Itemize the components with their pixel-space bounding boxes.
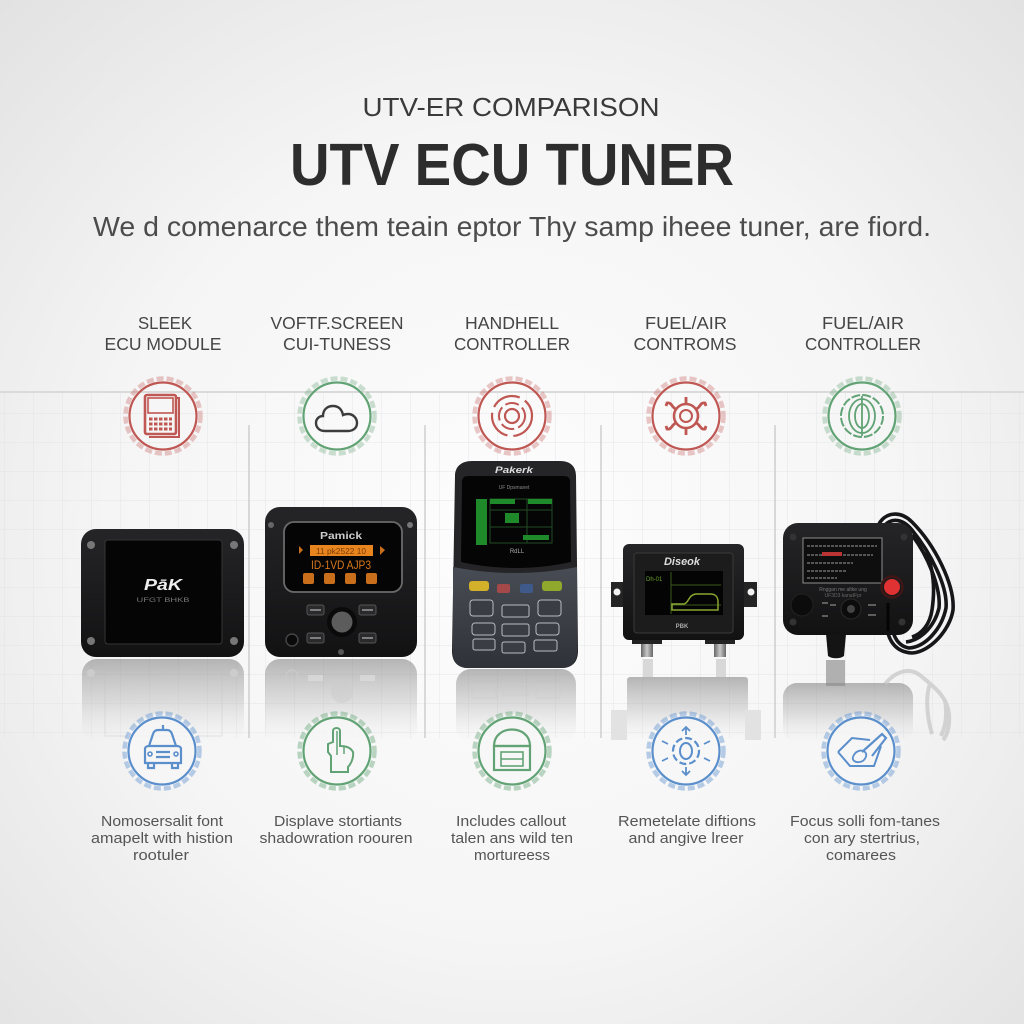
- description 1: Nomosersalit font: [101, 814, 223, 830]
- column heading 3: [454, 313, 570, 354]
- icon: hand on tablet badge: [824, 714, 898, 788]
- title: UTV ECU TUNER: [290, 132, 734, 198]
- device 5: fuel/air controller with cable: UF3D3 kanatFpr: [825, 593, 862, 599]
- reflection: cable controller: [783, 660, 949, 743]
- device 5: fuel/air controller with cable: Rnggan me altke ung: [819, 587, 867, 593]
- reflection: ECU module: [82, 659, 244, 743]
- device 3: handheld controller: [452, 461, 578, 668]
- description 3: Includes callout: [456, 814, 566, 830]
- description 1: rootuler: [133, 848, 189, 864]
- description 2: Displave stortiants: [274, 814, 402, 830]
- icon: ECU calculator badge: [126, 378, 200, 454]
- icon: fuel/air gear badge: [648, 378, 724, 454]
- description 2: [260, 814, 412, 847]
- column heading 5: [805, 313, 921, 354]
- column heading 5: CONTROLLER: [805, 334, 921, 354]
- device 3: handheld controller: Pakerk: [495, 465, 534, 475]
- device 3: handheld controller: UF Dpsmanet: [499, 485, 530, 491]
- column heading 3: CONTROLLER: [454, 334, 570, 354]
- description 5: comarees: [826, 848, 896, 864]
- subtitle: UTV-ER comparison: UTV-ER COMPARISON: [362, 92, 660, 122]
- device 2: touchscreen tuner: Pamick: [320, 531, 363, 542]
- column heading 2: VOFTF.SCREEN: [270, 313, 404, 333]
- column heading 3: HANDHELL: [465, 313, 559, 333]
- device 1: sleek ECU module: UFGT BHKB: [136, 598, 190, 604]
- description 1: [91, 814, 233, 864]
- description 3: talen ans wild ten: [451, 831, 573, 847]
- icon: remote gear badge: [648, 714, 724, 788]
- device 4: fuel/air display unit: Diseok: [664, 556, 701, 568]
- device 1: sleek ECU module: [81, 529, 244, 657]
- icon: circular target badge: [474, 378, 550, 454]
- column heading 4: [634, 313, 736, 354]
- intro text: We d comenarce them teain eptor Thy samp iheee tuner, are fiord.: [93, 211, 931, 242]
- reflection: handheld: [456, 669, 576, 743]
- device 1: sleek ECU module: PāK: [144, 577, 184, 594]
- column heading 5: FUEL/AIR: [822, 313, 904, 333]
- device 5: fuel/air controller with cable: [783, 514, 953, 658]
- column heading 4: FUEL/AIR: [645, 313, 727, 333]
- device 2: touchscreen tuner: 11 pk2522 10: [316, 547, 367, 556]
- reflection: display unit: [611, 659, 761, 741]
- icon: hand badge: [300, 714, 374, 788]
- column heading 1: SLEEK: [138, 313, 192, 333]
- description 5: Focus solli fom-tanes: [790, 814, 940, 830]
- device reflections: [82, 659, 949, 743]
- description 3: [451, 814, 573, 864]
- description 3: mortureess: [474, 848, 550, 864]
- column heading 1: ECU MODULE: [104, 334, 222, 354]
- column heading 1: [104, 313, 222, 354]
- description 4: and angive lreer: [628, 831, 744, 847]
- column heading 2: [270, 313, 404, 354]
- column heading 4: CONTROMS: [634, 334, 736, 354]
- icon: storage gate badge: [474, 714, 550, 788]
- description 1: amapelt with histion: [91, 831, 233, 847]
- description 5: con ary stertrius,: [804, 831, 920, 847]
- icon: cloud badge: [300, 378, 374, 454]
- description 4: [618, 814, 756, 847]
- device 4: fuel/air display unit: [611, 544, 757, 657]
- device 3: handheld controller: RdLL: [510, 549, 525, 555]
- device 4: fuel/air display unit: Dh-01: [646, 577, 663, 583]
- device 2: touchscreen tuner: ID-1VD AJP3: [311, 558, 371, 572]
- device 4: fuel/air display unit: PBK: [676, 624, 689, 630]
- reflection: touchscreen tuner: [265, 659, 417, 743]
- description 2: shadowration roouren: [260, 831, 412, 847]
- description 4: Remetelate diftions: [618, 814, 756, 830]
- icon: vehicle badge: [124, 714, 200, 788]
- description 5: [790, 814, 940, 864]
- column heading 2: CUI-TUNESS: [283, 334, 391, 354]
- device 2: touchscreen tuner: [265, 507, 417, 657]
- icon: leaf rings badge: [824, 378, 900, 454]
